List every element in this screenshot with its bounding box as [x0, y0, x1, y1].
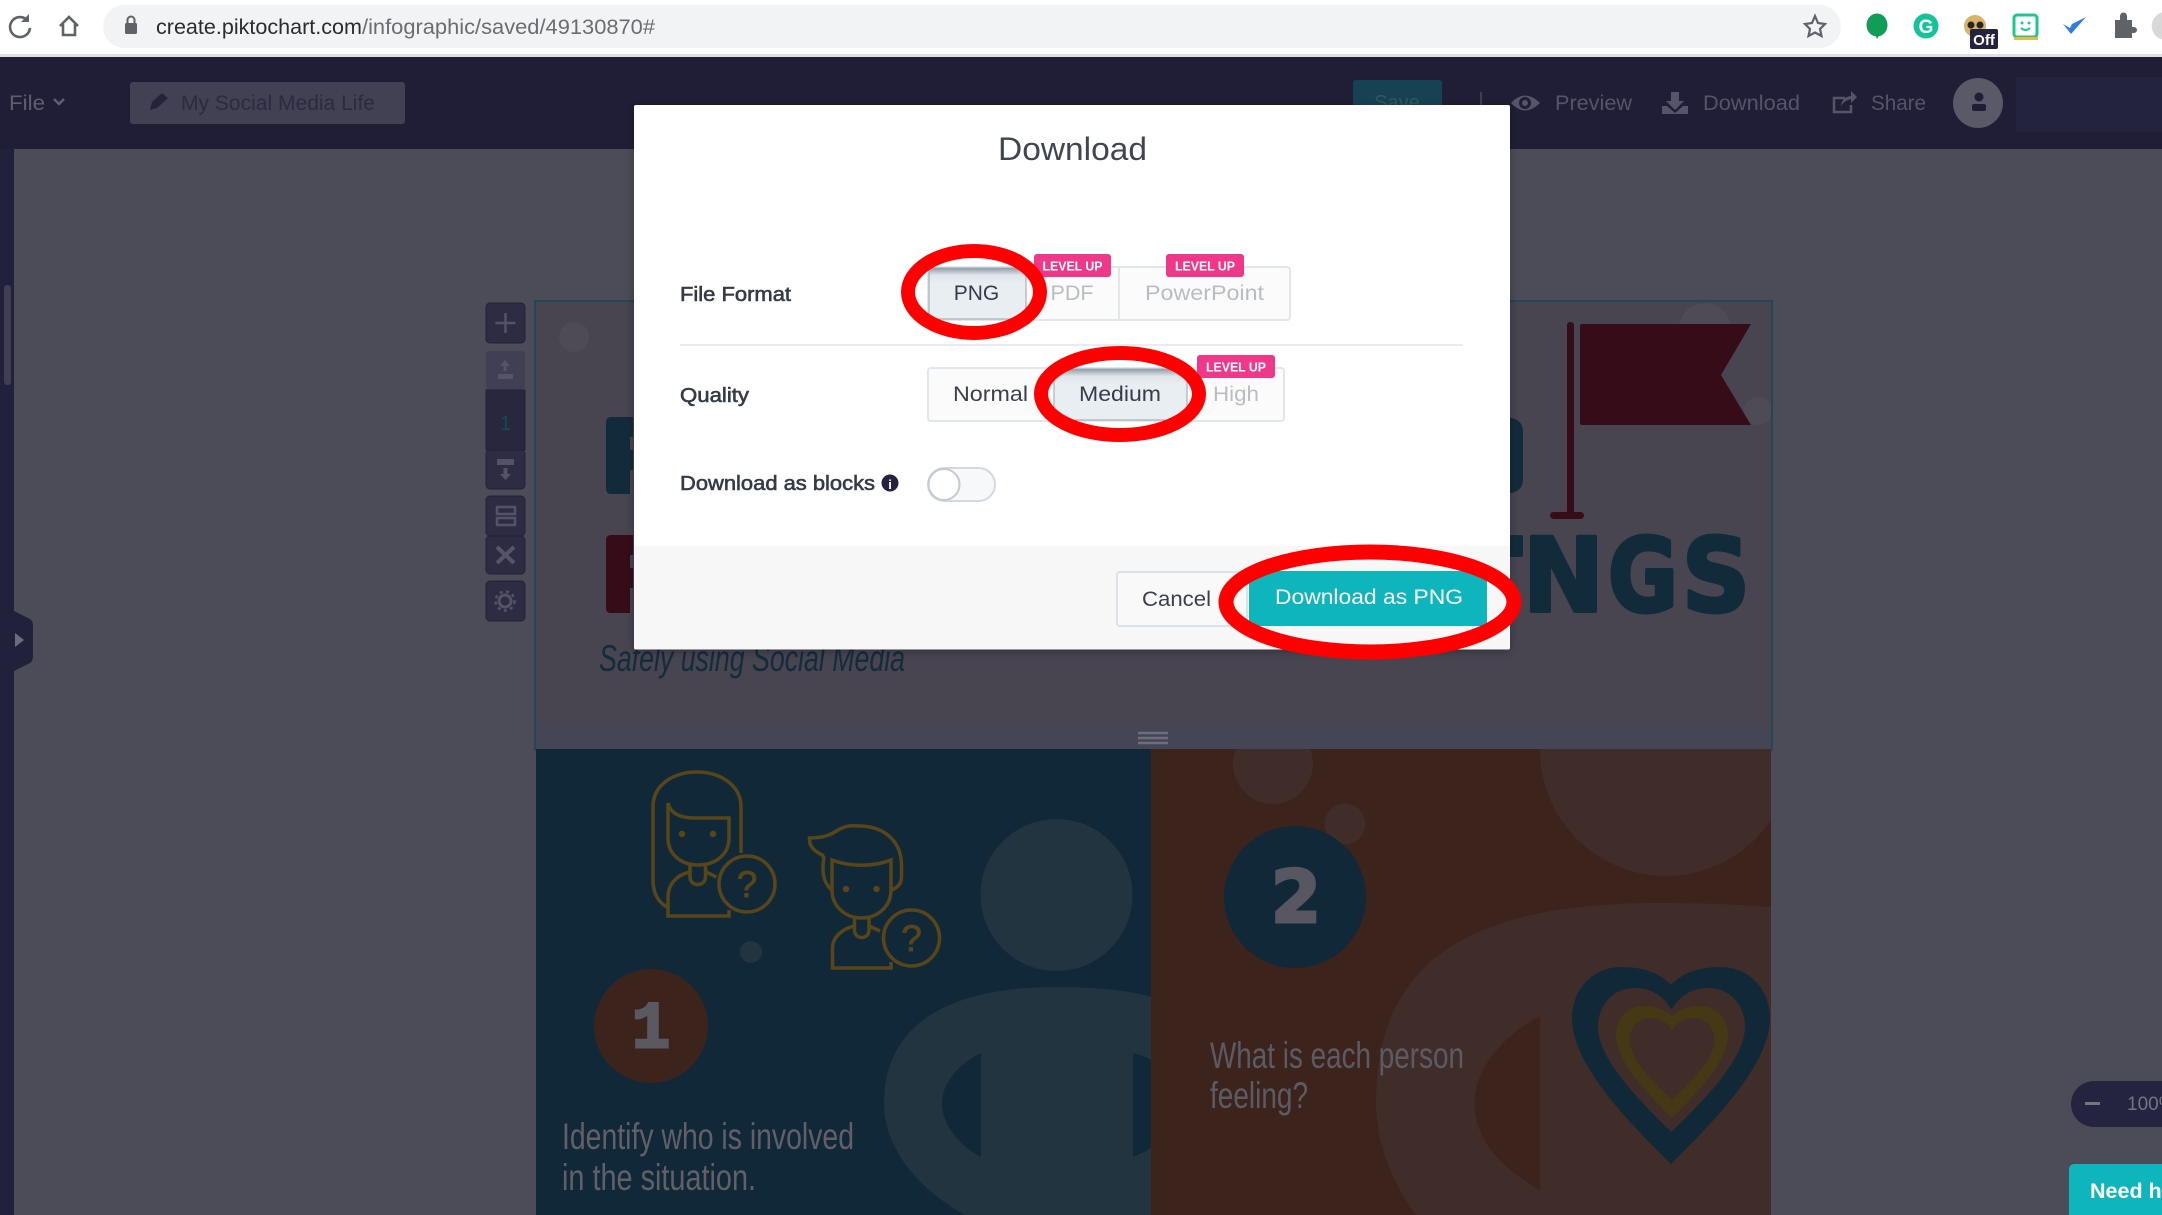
level up badge powerpoint: LEVEL UP — [1175, 260, 1235, 274]
pdf option: PDF — [1050, 282, 1094, 305]
person silhouette — [1376, 749, 1771, 1215]
step 1 text: in the situation. — [562, 1157, 756, 1198]
title fragment: red letter — [606, 535, 633, 613]
panel: step 1 — [536, 749, 1151, 1215]
png option selected — [929, 268, 1026, 319]
step 1 number badge: 1 — [632, 992, 670, 1067]
png option selected: PNG — [954, 282, 999, 305]
dialog footer — [634, 546, 1510, 650]
toggle switch — [928, 468, 995, 501]
icon: man with question mark: ? — [901, 918, 922, 959]
subtitle: Safely using Social Media — [599, 638, 905, 679]
title letters NGS: G — [1608, 517, 1678, 635]
quality label: Quality — [680, 385, 749, 407]
level up badge pdf — [1034, 254, 1111, 277]
move down button — [486, 450, 525, 489]
icon: red flag — [1550, 322, 1751, 519]
move up button — [486, 351, 525, 390]
block toolbar — [486, 303, 525, 621]
icon: nested hearts — [1572, 967, 1770, 1164]
row: download as blocks — [680, 468, 995, 501]
app header bar — [0, 57, 2162, 149]
icon: owl extension with off badge: Off — [1973, 32, 1996, 49]
document title button — [130, 82, 405, 124]
icon: star — [1805, 16, 1825, 36]
title letters NGS — [1523, 517, 1750, 635]
preview label: Preview — [1555, 92, 1633, 115]
download as png button — [1249, 571, 1487, 626]
browser toolbar — [0, 0, 2162, 57]
cancel button: Cancel — [1142, 588, 1211, 611]
high option: High — [1213, 383, 1259, 406]
normal option: Normal — [953, 383, 1028, 406]
download as png button: Download as PNG — [1275, 585, 1463, 609]
file menu — [9, 92, 64, 115]
icon: share — [1834, 91, 1857, 112]
step 1 number badge — [594, 969, 708, 1083]
sidebar collapse tab — [14, 611, 33, 671]
save button: Save — [1374, 92, 1420, 114]
profile avatar edge — [2152, 12, 2162, 40]
title fragment: T arm — [1505, 535, 1523, 557]
title letters NGS: S — [1682, 517, 1750, 635]
decorative circles — [1233, 749, 1366, 844]
icon: reload — [10, 14, 30, 37]
account panel — [2016, 77, 2162, 132]
row: quality — [680, 355, 1284, 421]
level up badge high: LEVEL UP — [1206, 360, 1266, 374]
user avatar — [1953, 78, 2003, 128]
share label: Share — [1871, 92, 1926, 115]
step 2 text: feeling? — [1210, 1075, 1308, 1116]
icon: woman with question mark — [653, 772, 775, 916]
duplicate button — [486, 496, 525, 536]
step 2 text: What is each person — [1210, 1035, 1464, 1076]
silhouette arm gap — [1474, 1016, 1540, 1190]
icon: expand arrow — [15, 633, 24, 647]
block divider band — [536, 725, 1771, 750]
decorative circles — [559, 303, 1772, 425]
block number — [486, 390, 525, 450]
drag handle — [1138, 733, 1168, 743]
small dot — [740, 941, 762, 963]
step 2 text — [1210, 1035, 1464, 1116]
dialog: download — [634, 105, 1510, 650]
step 2 number badge: 2 — [1271, 855, 1321, 939]
icon: woman with question mark: ? — [737, 864, 757, 905]
save button — [1353, 80, 1442, 120]
zoom control — [2071, 1081, 2162, 1127]
title letters NGS: N — [1523, 517, 1604, 635]
icon: home — [60, 17, 78, 35]
panel: step 2 — [1151, 749, 1771, 1215]
delete button — [486, 536, 525, 574]
icon: hangouts extension — [1866, 14, 1888, 39]
step 2 number badge — [1224, 826, 1366, 968]
cancel button — [1117, 572, 1247, 626]
person silhouette — [884, 819, 1151, 1215]
file format label: File Format — [680, 284, 791, 306]
icon: grammarly extension: G — [1919, 17, 1933, 38]
icon: lock — [125, 16, 137, 34]
left sidebar strip — [0, 149, 33, 1215]
document title button: My Social Media Life — [181, 92, 375, 115]
icon: grammarly extension — [1914, 14, 1938, 38]
file menu: File — [9, 92, 45, 115]
download label: Download — [1703, 92, 1800, 115]
block number: 1 — [500, 413, 511, 435]
url text — [156, 16, 655, 39]
medium option selected — [1054, 369, 1187, 420]
quality button group — [928, 368, 1284, 421]
help button — [2069, 1164, 2162, 1215]
add block button — [486, 303, 525, 343]
icon: info: i — [888, 477, 892, 492]
title fragment: blue letter end — [1505, 418, 1523, 493]
step 1 text — [562, 1116, 854, 1198]
settings button — [486, 581, 525, 621]
blocks label: Download as blocks — [680, 473, 875, 495]
level up badge pdf: LEVEL UP — [1042, 260, 1102, 274]
callout: red circle on PNG — [908, 251, 1040, 333]
callout: red circle on download button — [1226, 552, 1514, 652]
icon: bitmoji extension — [2014, 15, 2038, 40]
medium option selected: Medium — [1079, 383, 1161, 406]
url text: /infographic/saved/49130870# — [362, 16, 655, 39]
icon: info — [882, 474, 898, 492]
powerpoint option: PowerPoint — [1145, 282, 1264, 305]
step 1 text: Identify who is involved — [562, 1116, 854, 1157]
icon: download tray — [1662, 92, 1688, 114]
icon: check extension — [2063, 17, 2086, 34]
icon: owl extension with off badge — [1964, 15, 1998, 49]
dialog title: Download — [998, 131, 1147, 167]
row: file format — [680, 254, 1290, 320]
icon: preview eye — [1511, 96, 1540, 110]
callout: red circle on Medium — [1041, 353, 1199, 435]
canvas: title block — [535, 301, 1772, 750]
level up badge high — [1197, 355, 1275, 378]
url text: create.piktochart.com — [156, 16, 362, 39]
title fragment: blue letter — [606, 417, 633, 494]
level up badge powerpoint — [1166, 254, 1244, 277]
icon: puzzle extension — [2115, 13, 2137, 38]
icon: man with question mark — [809, 826, 940, 968]
address bar — [103, 5, 1841, 48]
format button group — [928, 267, 1290, 320]
